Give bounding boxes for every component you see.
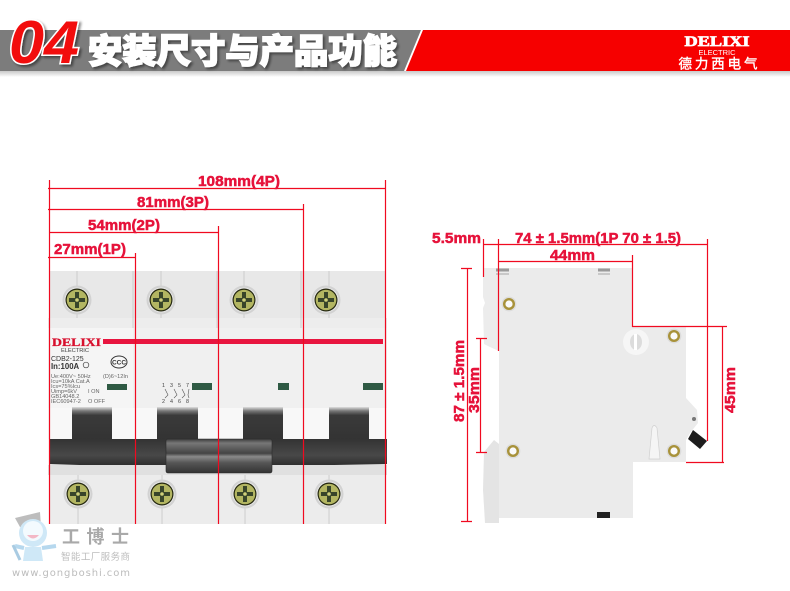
dimension: 87mm <box>451 268 472 522</box>
label logo: DELIXI <box>52 335 101 349</box>
bottom slot <box>597 512 610 518</box>
label panel: ELECTRIC <box>61 348 89 354</box>
watermark <box>12 512 130 579</box>
top terminal plate <box>50 271 385 318</box>
brand logo: 德力西电气 <box>678 56 758 72</box>
spec text: Uimp=6kV <box>51 389 77 395</box>
white toggle recess <box>48 408 387 439</box>
dimension: 87mm: 87 ± 1.5mm <box>451 340 468 422</box>
module seams <box>77 271 329 524</box>
dimension: 108mm 4P <box>48 173 386 524</box>
dimension: 27mm 1P: 27mm(1P) <box>54 241 126 258</box>
spec text: Ue:400V~ 50Hz <box>51 374 91 380</box>
tagline: 智能工厂服务商 <box>61 551 130 563</box>
lower clip <box>483 440 499 523</box>
top slots <box>496 268 610 272</box>
upper clip <box>483 268 499 351</box>
dimension: 44mm <box>498 247 633 327</box>
wiring diagram: 2 4 6 8 <box>162 399 189 405</box>
dimension: 35mm <box>466 338 487 452</box>
dimension: 54mm 2P <box>49 217 218 524</box>
brand logo <box>678 34 758 72</box>
section number 04: 04 <box>9 9 79 76</box>
dimension: 81mm 3P <box>48 194 304 524</box>
dimension: 5.5mm <box>432 230 484 277</box>
section title: 安装尺寸与产品功能 <box>88 33 397 71</box>
brand logo: DELIXI <box>684 34 750 50</box>
side slot <box>649 426 660 459</box>
handle tie bar <box>166 439 272 473</box>
brand logo: ELECTRIC <box>698 48 736 57</box>
front view breaker photo <box>48 271 387 524</box>
spec text: Icu=10kA Cat.A <box>51 379 90 385</box>
spec text: GB14048.2 <box>51 394 79 400</box>
dimension: 74mm <box>483 230 708 441</box>
spec text: (D)6~12In <box>103 374 128 380</box>
wiring diagram <box>162 383 189 405</box>
side view dimension lines <box>432 230 739 522</box>
spec text <box>51 374 128 405</box>
header banner <box>0 9 790 77</box>
website: www.gongboshi.com <box>12 568 130 579</box>
header gray band <box>0 30 421 71</box>
dimension: 108mm 4P: 108mm(4P) <box>198 173 280 190</box>
brand name: 工博士 <box>62 527 129 547</box>
dimension: 27mm 1P <box>48 241 136 524</box>
spec text: I ON <box>88 389 100 395</box>
side view breaker photo <box>483 268 707 523</box>
spec text: IEC60947-2 <box>51 399 81 405</box>
model text: CDB2-125 <box>51 356 84 363</box>
CCC mark: CCC <box>112 360 126 366</box>
side body <box>499 268 698 518</box>
dimension: 54mm 2P: 54mm(2P) <box>88 217 160 234</box>
center lock <box>623 329 649 355</box>
spec text: O OFF <box>88 399 106 405</box>
dimension: 44mm: 44mm <box>550 247 595 264</box>
wiring diagram: 1 3 5 7 <box>162 383 189 389</box>
black toggle <box>688 430 707 449</box>
breaker body <box>50 271 385 524</box>
dimension: 81mm 3P: 81mm(3P) <box>137 194 209 211</box>
status windows <box>107 383 383 390</box>
dimension: 5.5mm: 5.5mm <box>432 230 481 247</box>
top screws <box>62 286 340 314</box>
label panel: In:100A <box>51 362 80 371</box>
dimension: 74mm: 74 ± 1.5mm(1P 70 ± 1.5) <box>515 230 681 247</box>
CCC mark <box>111 356 127 368</box>
black handle bar <box>49 439 387 466</box>
dimension: 45mm: 45mm <box>722 367 739 413</box>
spec text: Ics=75%Icu <box>51 384 80 390</box>
mascot icon <box>13 512 56 561</box>
dimension: 45mm <box>632 326 739 462</box>
red stripe <box>103 339 383 344</box>
bottom screws <box>64 480 344 508</box>
header red band <box>406 30 790 71</box>
front view dimension lines <box>48 173 386 524</box>
dimension: 35mm: 35mm <box>466 367 483 413</box>
label panel <box>48 328 387 408</box>
rivets <box>502 297 681 458</box>
pivot dot <box>692 417 696 421</box>
toggle handles <box>72 407 369 440</box>
